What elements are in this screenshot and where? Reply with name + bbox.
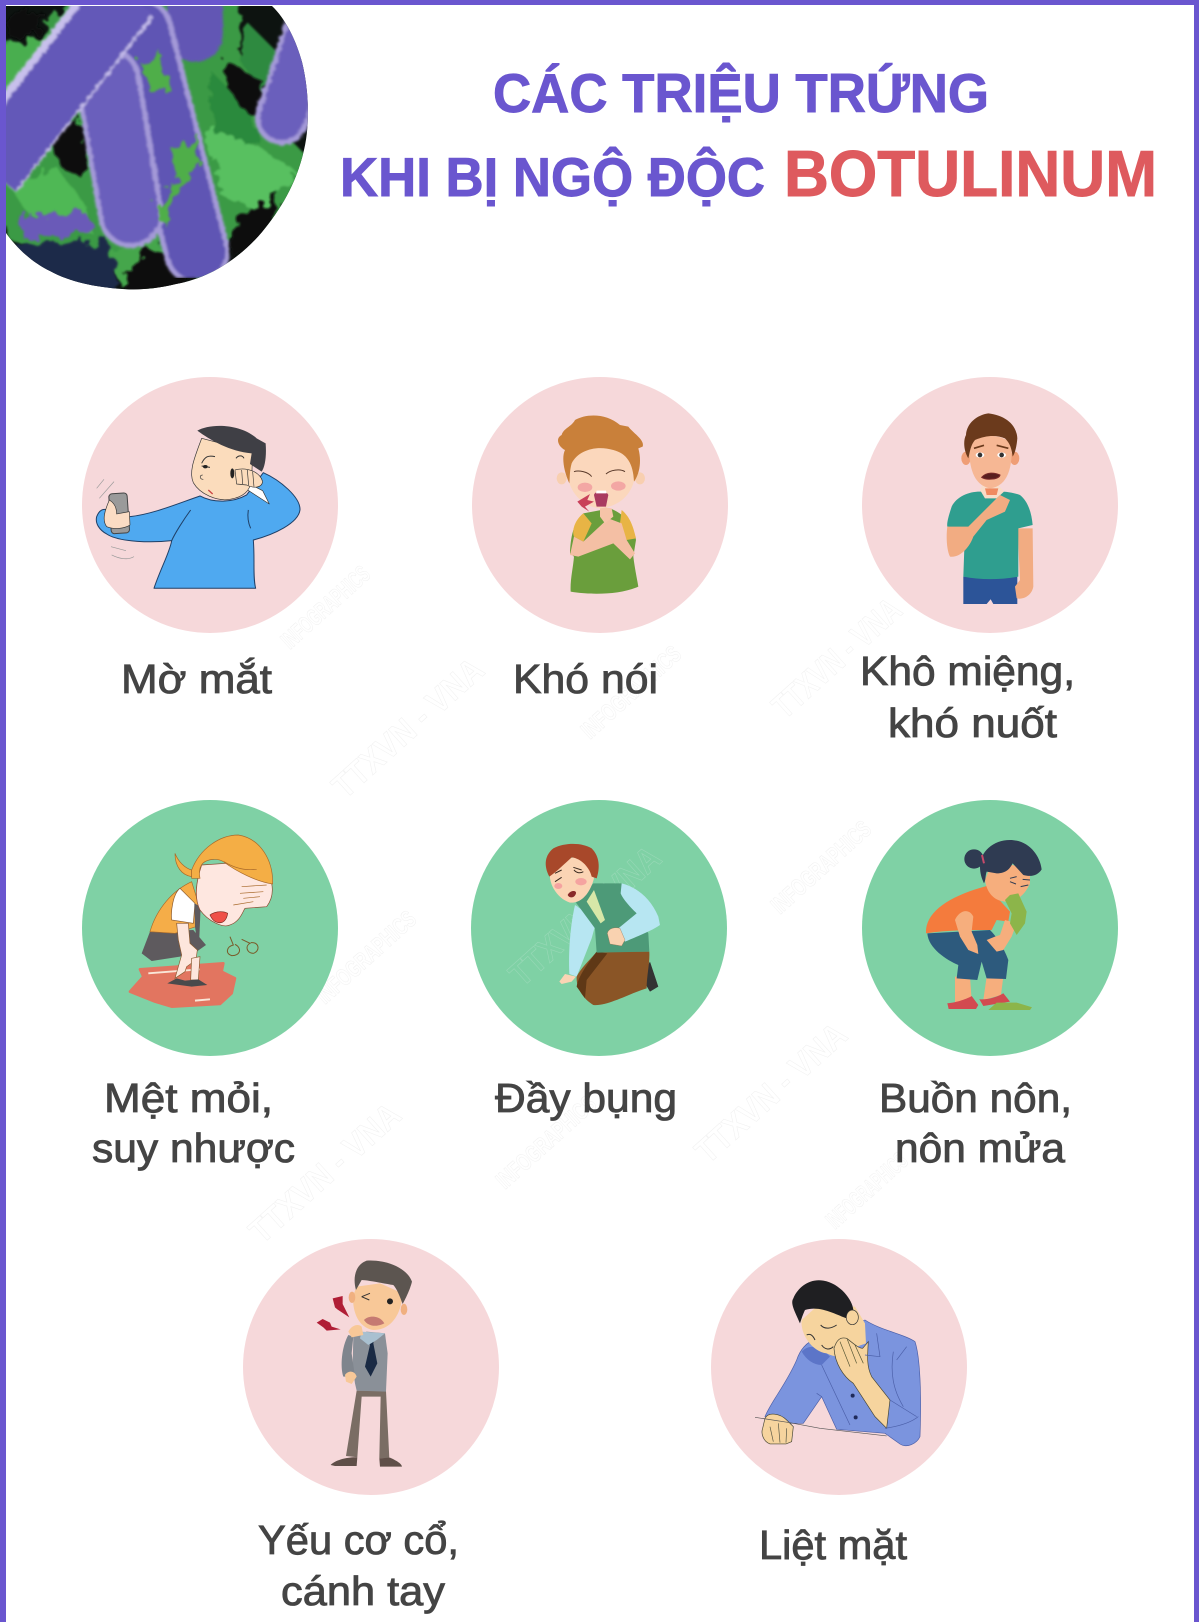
panel: Đầy bụng: TTXVN - VNA [502,839,669,994]
panel: Khó nói [472,377,728,702]
circle [862,800,1118,1056]
circle [82,377,338,633]
label: Đầy bụng [495,1075,677,1121]
panel: Yếu cơ cổ, cánh tay [243,1239,499,1614]
circle [471,800,727,1056]
text: INFOGRAPHICS [576,641,687,744]
panel: Buồn nôn, nôn mửa [862,800,1118,1171]
icon: man touching throat [947,413,1033,604]
label: Khô miệng, [860,648,1075,694]
label: cánh tay [281,1568,446,1614]
panel: Mờ mắt [82,377,338,702]
text: TTXVN - VNA [242,1096,409,1251]
circle [472,377,728,633]
icon: girl vomiting [926,840,1042,1010]
label: Mệt mỏi, [104,1075,273,1121]
label: khó nuốt [888,700,1058,746]
icon: boy kneeling holding stomach [546,844,660,1005]
text: INFOGRAPHICS [311,906,422,1009]
circle [243,1239,499,1495]
label: Yếu cơ cổ, [258,1517,459,1563]
label [879,1075,1072,1171]
icon: boy rubbing eye holding phone [96,426,300,588]
label: Khó nói [513,656,658,702]
circle [862,377,1118,633]
title: CÁC TRIỆU TRỨNG [493,62,989,124]
text: INFOGRAPHICS [276,561,376,654]
text: TTXVN - VNA [325,651,492,806]
label: suy nhược [92,1125,295,1171]
icon: botulinum bacteria photo [0,0,320,295]
title [340,62,1157,210]
text: INFOGRAPHICS [821,1147,913,1234]
icon: man covering drooping face [755,1280,921,1446]
label: Mờ mắt [121,656,273,702]
panel: Khô miệng, khó nuốt [860,377,1118,746]
label [860,648,1075,746]
icon: tired schoolgirl bending over [130,835,273,1007]
panel: Đầy bụng [471,800,727,1121]
label: Liệt mặt [759,1522,908,1568]
label: nôn mửa [895,1125,1065,1171]
title: KHI BỊ NGỘ ĐỘC [340,146,765,208]
title: BOTULINUM [784,137,1157,210]
text: INFOGRAPHICS [766,816,877,919]
label [258,1517,459,1614]
panel: Liệt mặt [711,1239,967,1568]
circle [82,800,338,1056]
icon: man with neck pain [317,1261,412,1467]
label [92,1075,295,1171]
text: INFOGRAPHICS [491,1091,602,1194]
label: Buồn nôn, [879,1075,1072,1121]
text: TTXVN - VNA [765,591,909,726]
panel: Mệt mỏi, suy nhược [82,800,338,1171]
circle [711,1239,967,1495]
text: TTXVN - VNA [688,1016,855,1171]
icon: boy with sore throat [557,415,645,594]
